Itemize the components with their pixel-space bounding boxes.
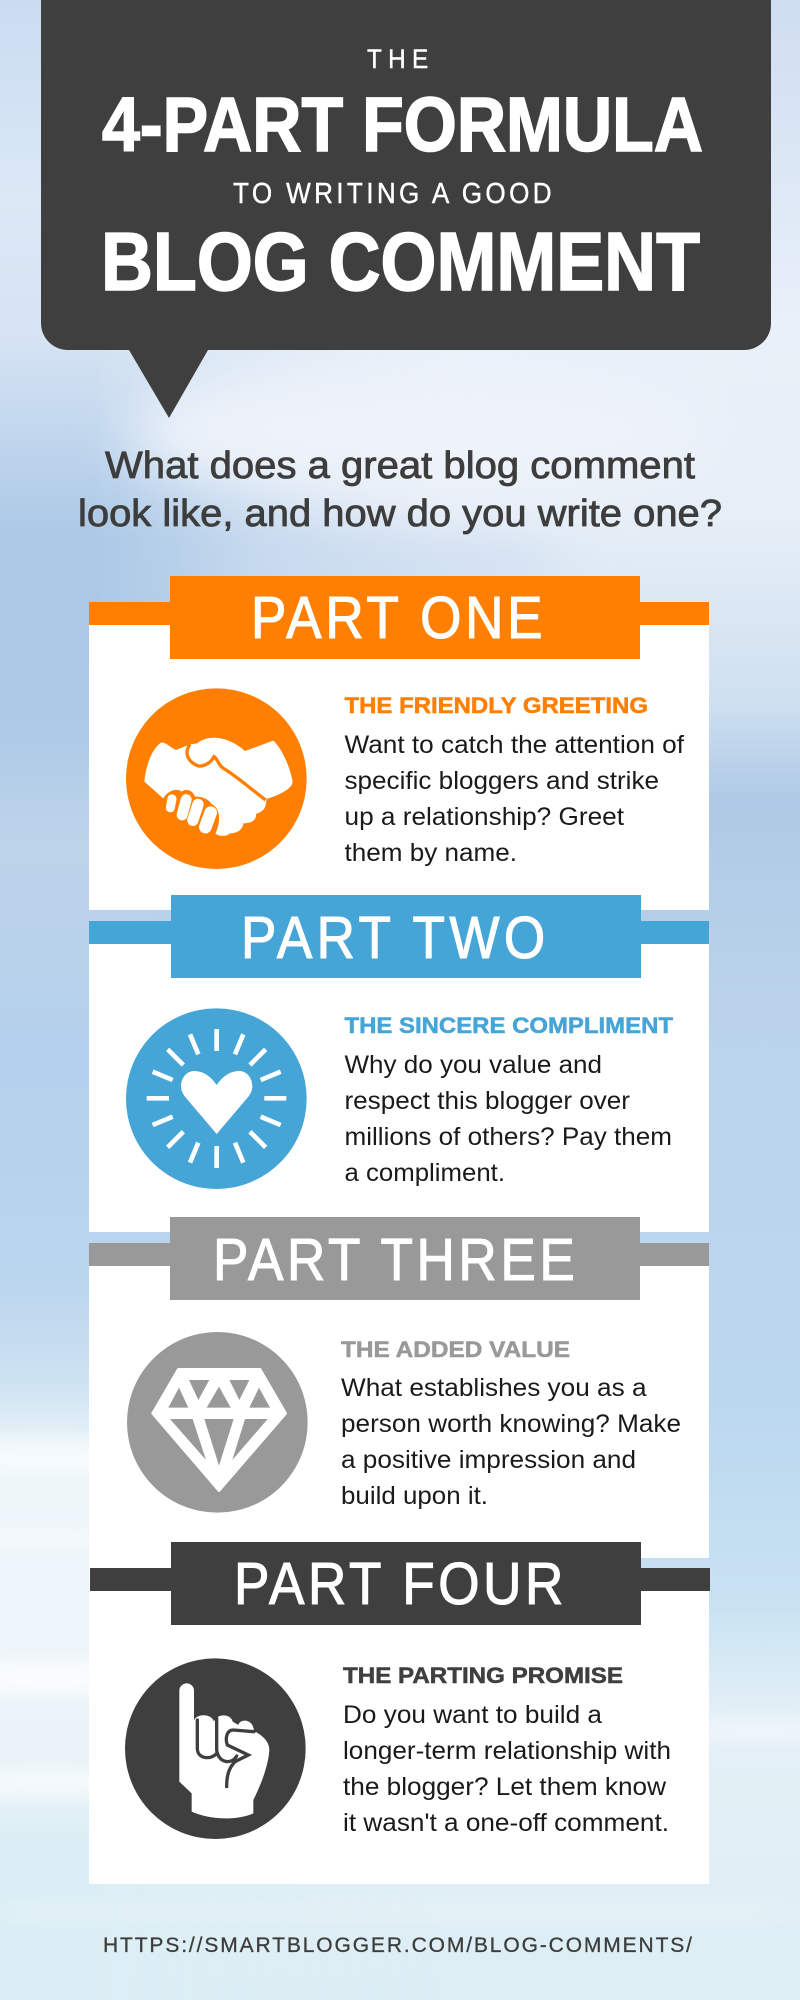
part four body: Do you want to build a xyxy=(343,1701,602,1729)
part three ribbon xyxy=(89,1217,709,1300)
part one ribbon xyxy=(89,576,709,659)
part one ribbon: PART ONE xyxy=(251,584,543,651)
part one heading: THE FRIENDLY GREETING xyxy=(344,693,648,718)
panel: part three xyxy=(89,1217,709,1570)
part two body xyxy=(344,1051,672,1187)
part four body xyxy=(343,1701,671,1837)
part three body: person worth knowing? Make xyxy=(341,1410,681,1438)
speech bubble header xyxy=(41,0,771,418)
part three heading: THE ADDED VALUE xyxy=(341,1337,570,1362)
part one body: up a relationship? Greet xyxy=(344,803,624,831)
panel: part two xyxy=(89,895,709,1232)
part four body: it wasn't a one-off comment. xyxy=(343,1809,669,1837)
part two body: respect this blogger over xyxy=(344,1087,630,1115)
part four ribbon: PART FOUR xyxy=(234,1550,563,1617)
part one body: them by name. xyxy=(344,839,517,867)
panel: part four xyxy=(89,1542,710,1884)
question text xyxy=(78,445,722,535)
icon: raised pinky hand xyxy=(125,1658,306,1839)
icon: diamond xyxy=(127,1332,308,1513)
part one body: Want to catch the attention of xyxy=(344,731,684,759)
icon: handshake xyxy=(126,688,307,869)
header line: to writing a good: TO WRITING A GOOD xyxy=(233,177,552,209)
part four heading: THE PARTING PROMISE xyxy=(343,1663,623,1688)
header line: 4-part formula: 4-PART FORMULA xyxy=(102,82,703,168)
part one body: specific bloggers and strike xyxy=(344,767,659,795)
part three ribbon: PART THREE xyxy=(213,1226,575,1293)
part two ribbon xyxy=(89,895,709,978)
part two ribbon: PART TWO xyxy=(241,904,545,971)
part four body: the blogger? Let them know xyxy=(343,1773,667,1801)
part one body xyxy=(344,731,684,867)
part three body: a positive impression and xyxy=(341,1446,636,1474)
question text: What does a great blog comment xyxy=(105,445,695,487)
part two body: a compliment. xyxy=(344,1159,505,1187)
part three body xyxy=(341,1374,681,1510)
question text: look like, and how do you write one? xyxy=(78,493,722,535)
part two body: Why do you value and xyxy=(344,1051,602,1079)
part three body: build upon it. xyxy=(341,1482,488,1510)
source url: HTTPS://SMARTBLOGGER.COM/BLOG-COMMENTS/ xyxy=(103,1934,692,1957)
part four ribbon xyxy=(90,1542,710,1625)
part three body: What establishes you as a xyxy=(341,1374,647,1402)
panel: part one xyxy=(89,576,709,910)
icon: heart with rays xyxy=(126,1008,307,1189)
part two heading: THE SINCERE COMPLIMENT xyxy=(344,1013,674,1038)
part four body: longer-term relationship with xyxy=(343,1737,671,1765)
part two body: millions of others? Pay them xyxy=(344,1123,672,1151)
header line: blog comment: BLOG COMMENT xyxy=(101,215,700,308)
header line: the: THE xyxy=(367,45,428,74)
